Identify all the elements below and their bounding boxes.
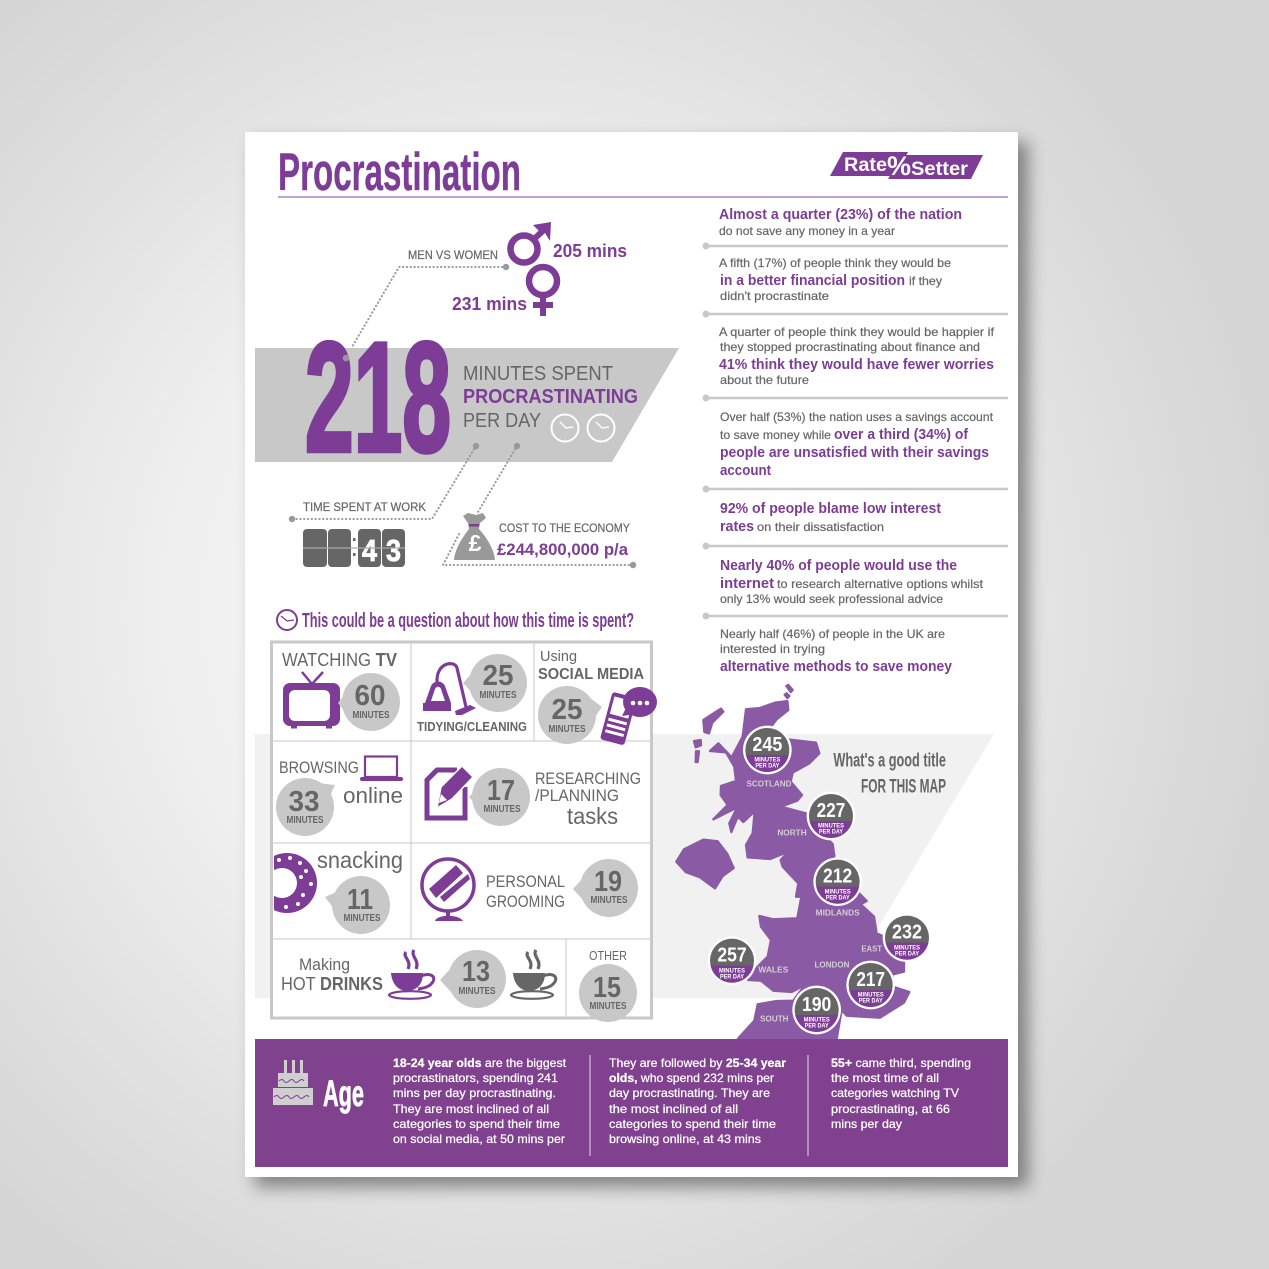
main banner: 218 minutes: 218: [305, 311, 451, 485]
fact: alternative methods: alternative methods to save money: [720, 659, 952, 675]
cell: other: OTHER: [589, 948, 627, 963]
fact: no savings: do not save any money in a year: [719, 224, 895, 238]
cell: browsing online: online: [343, 783, 403, 808]
map title: [833, 751, 946, 798]
flip clock: [303, 529, 405, 568]
icon: document and pencil: [427, 766, 473, 818]
cell: other: [579, 948, 637, 1022]
icon: clock: [552, 414, 578, 442]
badge: Wales 257: 257: [717, 944, 747, 967]
icon: money bag: £: [469, 530, 482, 556]
cost to the economy stat: £244,800,000 p/a: [497, 540, 629, 559]
badge: South 190: [792, 986, 841, 1034]
fact: financial position: in a better financial position: [720, 273, 905, 289]
icon: birthday cake: [273, 1060, 313, 1105]
badge: North 227: MINUTES: [818, 823, 844, 830]
logo: RateSetter: %: [887, 151, 911, 181]
fact: financial position: [719, 256, 951, 303]
fact: financial position: A fifth (17%) of people think they would be: [719, 256, 951, 270]
badge: Midlands 212: PER DAY: [826, 894, 850, 901]
men vs women stat: 205 mins: [553, 241, 627, 261]
section heading: how time is spent: [277, 610, 634, 632]
fact: no savings: [719, 207, 962, 238]
cell: other: 15: [593, 972, 621, 1004]
badge: Wales 257: PER DAY: [720, 973, 744, 980]
fact: low interest rates: [720, 501, 941, 535]
badge: South 190: MINUTES: [804, 1017, 830, 1024]
icon: vacuum cleaner: [423, 664, 476, 715]
icon: grey cup: [511, 950, 556, 999]
cell: watching TV: [282, 649, 400, 731]
cell: using social media: [538, 648, 657, 746]
logo: RateSetter: [830, 151, 983, 181]
map title: What's a good title: [833, 751, 946, 772]
age column: 25-34: categories to spend their time: [609, 1117, 776, 1131]
badge: Midlands 212: MINUTES: [825, 888, 851, 895]
fact: low interest rates: on their dissatisfaction: [757, 520, 884, 534]
badge: Scotland 245: MINUTES: [754, 757, 781, 764]
fact: alternative methods: interested in trying: [720, 642, 825, 656]
main banner: 218 minutes: PROCRASTINATING: [463, 386, 638, 408]
fact: fewer worries: about the future: [720, 373, 809, 387]
fact: low interest rates: 92% of people blame low interest: [720, 501, 941, 517]
cell: browsing online: [276, 756, 403, 836]
age column: 25-34: day procrastinating. They are: [609, 1086, 770, 1100]
age column: 18-24: 18-24 year olds are the biggest: [393, 1056, 567, 1070]
fact: savings account: over a third (34%) of: [834, 427, 968, 443]
badge: Midlands 212: 212: [823, 865, 852, 888]
map title: FOR THIS MAP: [861, 777, 946, 798]
region labels: SCOTLAND: [746, 780, 792, 789]
section heading: how time is spent: This could be a question about how this time is spent?: [302, 610, 634, 632]
badge: North 227: [807, 792, 855, 840]
age column: 18-24: mins per day procrastinating.: [393, 1086, 556, 1100]
cell: using social media: SOCIAL MEDIA: [538, 666, 644, 683]
cell: watching TV: WATCHING TV: [282, 649, 398, 670]
cell: researching/planning tasks: 17: [487, 775, 515, 807]
region labels: WALES: [758, 965, 789, 974]
cell: personal grooming: 19: [594, 866, 622, 898]
region labels: EAST: [861, 944, 882, 953]
region labels: MIDLANDS: [816, 909, 860, 918]
icon: mirror: [422, 859, 474, 921]
icon: doughnut: [274, 853, 317, 913]
fact: internet research: Nearly 40% of people would use the: [720, 558, 957, 574]
badge: Scotland 245: 245: [752, 733, 782, 756]
cost to the economy stat: COST TO THE ECONOMY: [499, 521, 630, 535]
cell: personal grooming: MINUTES: [590, 894, 628, 906]
cell: snacking: [274, 851, 402, 934]
age column: 18-24: procrastinators, spending 241: [393, 1071, 558, 1085]
age column: 55+: the most time of all: [831, 1071, 939, 1085]
badge: East 232: MINUTES: [894, 944, 920, 951]
cell: snacking: snacking: [317, 847, 403, 873]
age panel: Age: [323, 1073, 364, 1114]
age column: 55+: mins per day: [831, 1117, 902, 1131]
age column: 18-24: They are most inclined of all: [393, 1102, 549, 1116]
badge: South 190: 190: [802, 993, 831, 1016]
badge: London 217: PER DAY: [859, 998, 883, 1005]
age column: 25-34: They are followed by 25-34 year: [609, 1056, 786, 1070]
badge: Midlands 212: [813, 857, 862, 906]
cell: browsing online: MINUTES: [286, 814, 324, 826]
badge: London 217: 217: [856, 968, 885, 991]
age column: 25-34: browsing online, at 43 mins: [609, 1132, 761, 1146]
icon: laptop: [360, 756, 403, 781]
fact: internet research: [720, 558, 984, 606]
main banner: 218 minutes: PER DAY: [463, 410, 541, 432]
age column: 18-24: on social media, at 50 mins per: [393, 1132, 565, 1146]
region labels: SOUTH: [760, 1014, 789, 1023]
time spent at work stat: [289, 443, 479, 568]
cell: making hot drinks: HOT DRINKS: [281, 974, 383, 994]
cell: personal grooming: PERSONAL: [486, 872, 565, 891]
fact: internet research: only 13% would seek professional advice: [720, 592, 943, 606]
cell: making hot drinks: 13: [462, 956, 490, 988]
badge: London 217: [846, 961, 895, 1009]
map shape: [676, 685, 909, 1039]
cell: snacking: 11: [347, 884, 373, 916]
men vs women stat: MEN VS WOMEN: [408, 248, 498, 262]
badge: East 232: PER DAY: [895, 950, 919, 957]
cell: making hot drinks: Making: [299, 955, 350, 974]
badge: North 227: 227: [817, 799, 845, 822]
cell: researching/planning tasks: [427, 766, 641, 829]
icon: male symbol: [510, 222, 551, 262]
fact: alternative methods: Nearly half (46%) of people in the UK are: [720, 627, 945, 641]
fact: alternative methods: [720, 627, 952, 675]
badge: East 232: 232: [892, 921, 922, 944]
badge: South 190: PER DAY: [805, 1023, 829, 1030]
icon: phone and speech bubble: [600, 687, 657, 746]
flip clock: 4: [362, 533, 378, 568]
cell: other: MINUTES: [590, 1000, 626, 1012]
age panel: [255, 1039, 1008, 1167]
cell: using social media: 25: [552, 694, 582, 726]
badge: Wales 257: MINUTES: [719, 967, 745, 974]
fact: savings account: Over half (53%) the nation uses a savings account: [720, 410, 994, 424]
badge: Scotland 245: [743, 726, 792, 774]
badge: East 232: [883, 913, 931, 962]
fact: fewer worries: they stopped procrastinating about finance and: [720, 340, 980, 354]
fact: fewer worries: 41% think they would have fewer worries: [719, 357, 994, 373]
cell: making hot drinks: [281, 950, 556, 1008]
cell: using social media: Using: [540, 648, 577, 665]
cell: watching TV: MINUTES: [352, 709, 390, 721]
cell: tidying/cleaning: [417, 654, 527, 734]
badge: Wales 257: [708, 936, 756, 985]
badge: North 227: PER DAY: [819, 829, 843, 836]
age column: 55+: [831, 1056, 971, 1131]
cell: watching TV: 60: [354, 680, 386, 712]
main banner: 218 minutes: MINUTES SPENT: [463, 363, 613, 385]
logo: RateSetter: Setter: [911, 159, 969, 180]
cell: researching/planning tasks: MINUTES: [484, 803, 520, 815]
fact: savings account: to save money while: [720, 428, 831, 442]
region labels: NORTH: [777, 829, 807, 838]
badge: London 217: MINUTES: [858, 992, 884, 999]
badge: Scotland 245: PER DAY: [755, 763, 780, 770]
fact: fewer worries: [719, 325, 995, 387]
cell: researching/planning tasks: /PLANNING: [535, 786, 619, 805]
icon: clock: [588, 414, 614, 442]
fact: savings account: people are unsatisfied with their savings: [720, 445, 989, 461]
cell: personal grooming: GROOMING: [486, 892, 565, 911]
logo: RateSetter: Rate: [844, 155, 887, 176]
flip clock: 3: [386, 533, 401, 568]
cell: researching/planning tasks: tasks: [567, 803, 618, 829]
light background band: [255, 734, 994, 998]
cell: browsing online: BROWSING: [279, 758, 359, 777]
cell: tidying/cleaning: 25: [482, 660, 514, 692]
age column: 55+: procrastinating, at 66: [831, 1102, 950, 1116]
title: Procrastination: [278, 143, 521, 202]
fact: fewer worries: A quarter of people think they would be happier if: [719, 325, 995, 339]
cell: tidying/cleaning: TIDYING/CLEANING: [417, 720, 527, 734]
fact: low interest rates: rates: [720, 519, 754, 535]
main banner: 218 minutes: [255, 311, 679, 485]
fact: internet research: internet: [720, 576, 774, 592]
cell: personal grooming: [422, 859, 638, 921]
age column: 55+: categories watching TV: [831, 1086, 959, 1100]
cell: snacking: MINUTES: [344, 912, 380, 924]
age column: 25-34: olds, who spend 232 mins per: [609, 1071, 774, 1085]
cell: researching/planning tasks: RESEARCHING: [535, 769, 641, 788]
icon: purple cup: [389, 950, 434, 999]
facts column: [702, 207, 1008, 675]
region labels: [746, 780, 882, 1023]
age column: 18-24: [393, 1056, 567, 1146]
men vs women stat: [352, 222, 627, 347]
fact: financial position: didn't procrastinate: [720, 289, 829, 303]
fact: savings account: [720, 410, 994, 479]
icon: female symbol: [529, 267, 557, 316]
cell: making hot drinks: MINUTES: [458, 985, 496, 997]
time spent at work stat: TIME SPENT AT WORK: [303, 500, 426, 514]
cell: tidying/cleaning: MINUTES: [480, 689, 516, 701]
age column: 55+: 55+ came third, spending: [831, 1056, 971, 1070]
activity grid: [257, 642, 657, 1022]
icon: money bag: [454, 513, 495, 560]
cost to the economy stat: [443, 443, 636, 568]
cell: using social media: MINUTES: [548, 723, 586, 735]
paper sheet: [245, 132, 1018, 1177]
age column: 25-34: the most inclined of all: [609, 1102, 738, 1116]
icon: television: [283, 672, 340, 728]
region labels: LONDON: [814, 960, 850, 969]
cell: browsing online: 33: [288, 786, 320, 818]
fact: internet research: to research alternative options whilst: [777, 577, 984, 591]
fact: savings account: account: [720, 463, 771, 479]
age column: 18-24: categories to spend their time: [393, 1117, 560, 1131]
men vs women stat: 231 mins: [452, 294, 527, 314]
fact: no savings: Almost a quarter (23%) of the nation: [719, 207, 962, 223]
UK map: [676, 685, 946, 1039]
fact: financial position: if they: [909, 274, 942, 288]
age column: 25-34: [609, 1056, 786, 1146]
